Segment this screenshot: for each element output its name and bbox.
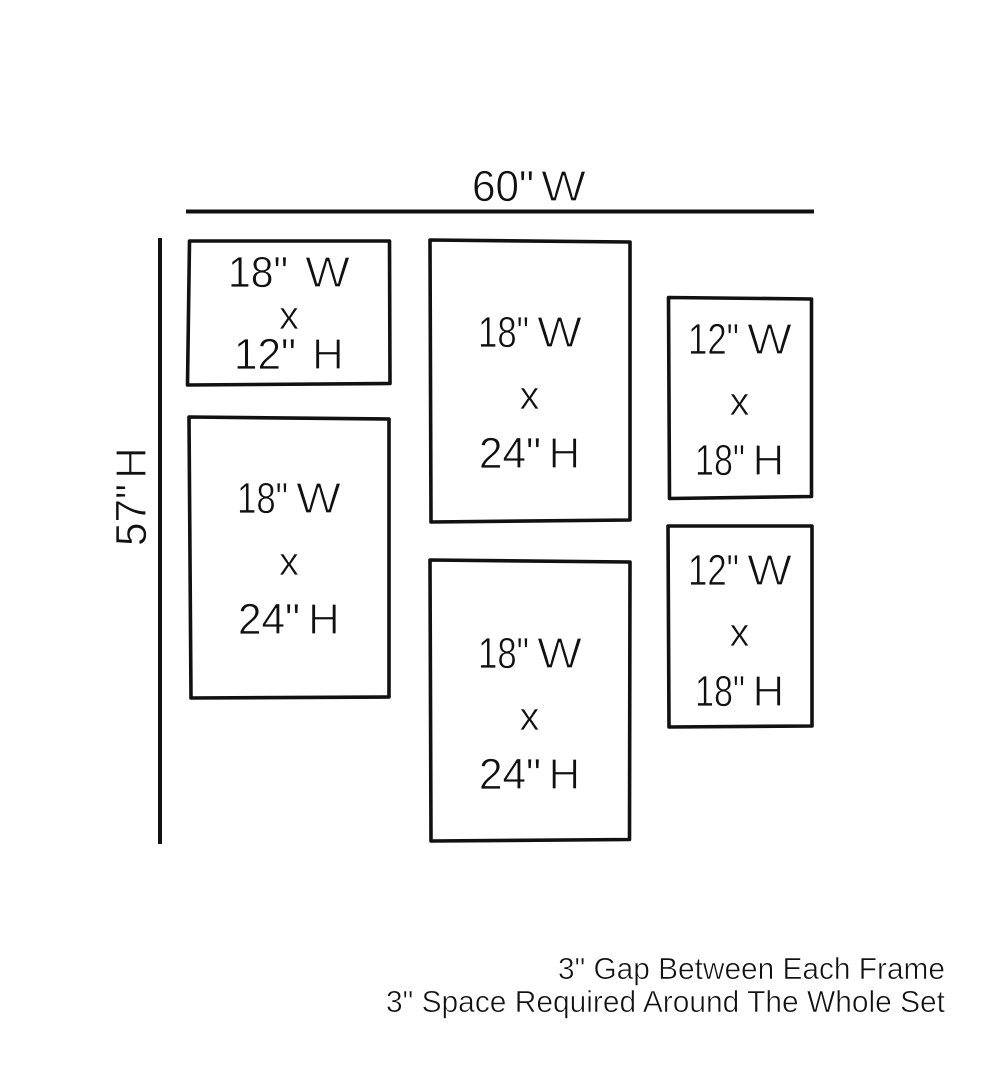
frame: 18 x 24 lower left: 24" xyxy=(238,595,300,644)
frame: 12 x 18 lower right: 18" xyxy=(695,667,745,716)
frame: 12 x 18 upper right xyxy=(668,298,812,498)
frame: 12 x 18 upper right: 12" xyxy=(688,315,739,364)
overall width label xyxy=(472,162,587,211)
frame: 18 x 24 lower centre: 24" xyxy=(479,750,541,799)
frame: 18 x 24 top centre: W xyxy=(537,308,583,357)
frame: 18 x 24 top centre xyxy=(430,240,630,522)
frame: 18 x 24 lower left: x xyxy=(279,540,299,584)
frame: 12 x 18 lower right: x xyxy=(730,611,750,655)
overall width label: 60" xyxy=(472,162,534,211)
frame: 12 x 18 lower right: H xyxy=(752,667,784,716)
frame: 12 x 18 lower right: W xyxy=(747,546,793,595)
frame: 12 x 18 upper right: W xyxy=(747,315,793,364)
frame: 18 x 12 top left: 12" xyxy=(234,330,296,379)
overall width label: W xyxy=(541,162,587,211)
frame: 18 x 12 top left: 18" xyxy=(228,248,288,297)
overall height label xyxy=(107,447,156,546)
frame: 18 x 12 top left: H xyxy=(312,330,344,379)
frame: 18 x 24 lower left: W xyxy=(296,474,342,523)
frame: 12 x 18 upper right: H xyxy=(752,436,784,485)
width dimension line xyxy=(186,210,814,214)
spacing notes: 3" Gap Between Each Frame xyxy=(558,951,945,986)
frame: 18 x 24 lower left: H xyxy=(308,595,340,644)
overall height label: H xyxy=(107,447,156,479)
frame: 18 x 24 lower left xyxy=(189,417,389,698)
frame: 18 x 12 top left xyxy=(188,241,390,385)
frame: 12 x 18 lower right xyxy=(668,526,812,727)
frame: 18 x 24 top centre: 24" xyxy=(479,429,541,478)
height dimension line xyxy=(158,238,162,844)
spacing notes: 3" Space Required Around The Whole Set xyxy=(386,984,945,1019)
frame: 18 x 24 lower centre xyxy=(430,560,630,841)
frame: 12 x 18 upper right: x xyxy=(730,380,750,424)
frame: 12 x 18 upper right: 18" xyxy=(695,436,745,485)
frame: 18 x 24 top centre: 18" xyxy=(478,308,529,357)
frame: 18 x 24 lower centre: 18" xyxy=(478,629,529,678)
frame: 18 x 12 top left: W xyxy=(305,248,351,297)
frame: 18 x 24 top centre: H xyxy=(548,429,580,478)
frame: 18 x 24 lower centre: H xyxy=(548,750,580,799)
frame: 12 x 18 lower right: 12" xyxy=(688,546,739,595)
overall height label: 57" xyxy=(107,484,156,546)
spacing notes xyxy=(386,951,945,1019)
frame: 18 x 24 lower centre: W xyxy=(537,629,583,678)
frame: 18 x 24 lower centre: x xyxy=(520,695,540,739)
frame: 18 x 12 top left: x xyxy=(279,294,299,338)
frame: 18 x 24 top centre: x xyxy=(520,374,540,418)
frame: 18 x 24 lower left: 18" xyxy=(237,474,288,523)
